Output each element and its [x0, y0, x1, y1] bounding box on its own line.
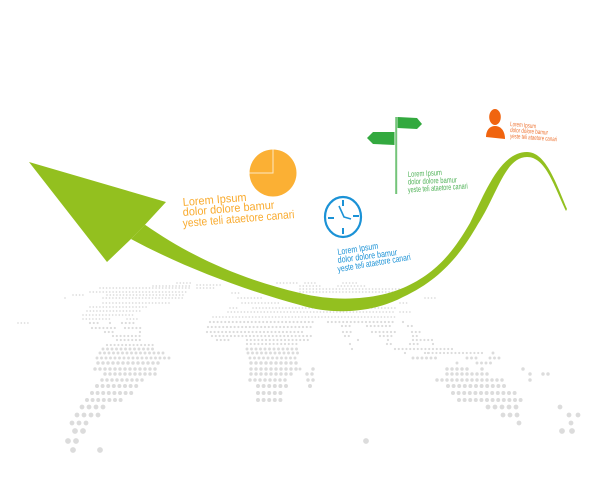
text: red-orange caption: yeste teli ataetore canari	[510, 133, 557, 143]
text: green caption	[408, 168, 468, 194]
text: red-orange caption: dolor dolore bamur	[510, 127, 549, 137]
text: green caption: yeste teli ataetore canari	[408, 182, 468, 194]
green arrow	[29, 152, 567, 311]
text: blue caption: dolor dolore bamur	[337, 247, 398, 265]
text: orange caption	[182, 192, 295, 230]
arrow curve shaft	[131, 152, 567, 311]
text: red-orange caption: Lorem Ipsum	[510, 121, 536, 130]
arrow head	[29, 162, 166, 262]
icon: clock	[325, 197, 361, 237]
icon: pie chart	[250, 150, 296, 196]
text: blue caption	[337, 241, 411, 274]
dotted world map	[18, 283, 579, 450]
text: green caption: dolor dolore bamur	[408, 175, 457, 186]
text: red-orange caption	[510, 121, 557, 143]
text: orange caption: yeste teli ataetore canari	[182, 209, 295, 230]
text: orange caption: dolor dolore bamur	[182, 200, 275, 219]
text: green caption: Lorem Ipsum	[408, 168, 442, 179]
text: blue caption: yeste teli ataetore canari	[337, 252, 411, 274]
text: blue caption: Lorem Ipsum	[337, 241, 379, 257]
text: orange caption: Lorem Ipsum	[182, 192, 247, 209]
icon: person	[486, 109, 505, 139]
icon: signpost	[367, 117, 422, 194]
